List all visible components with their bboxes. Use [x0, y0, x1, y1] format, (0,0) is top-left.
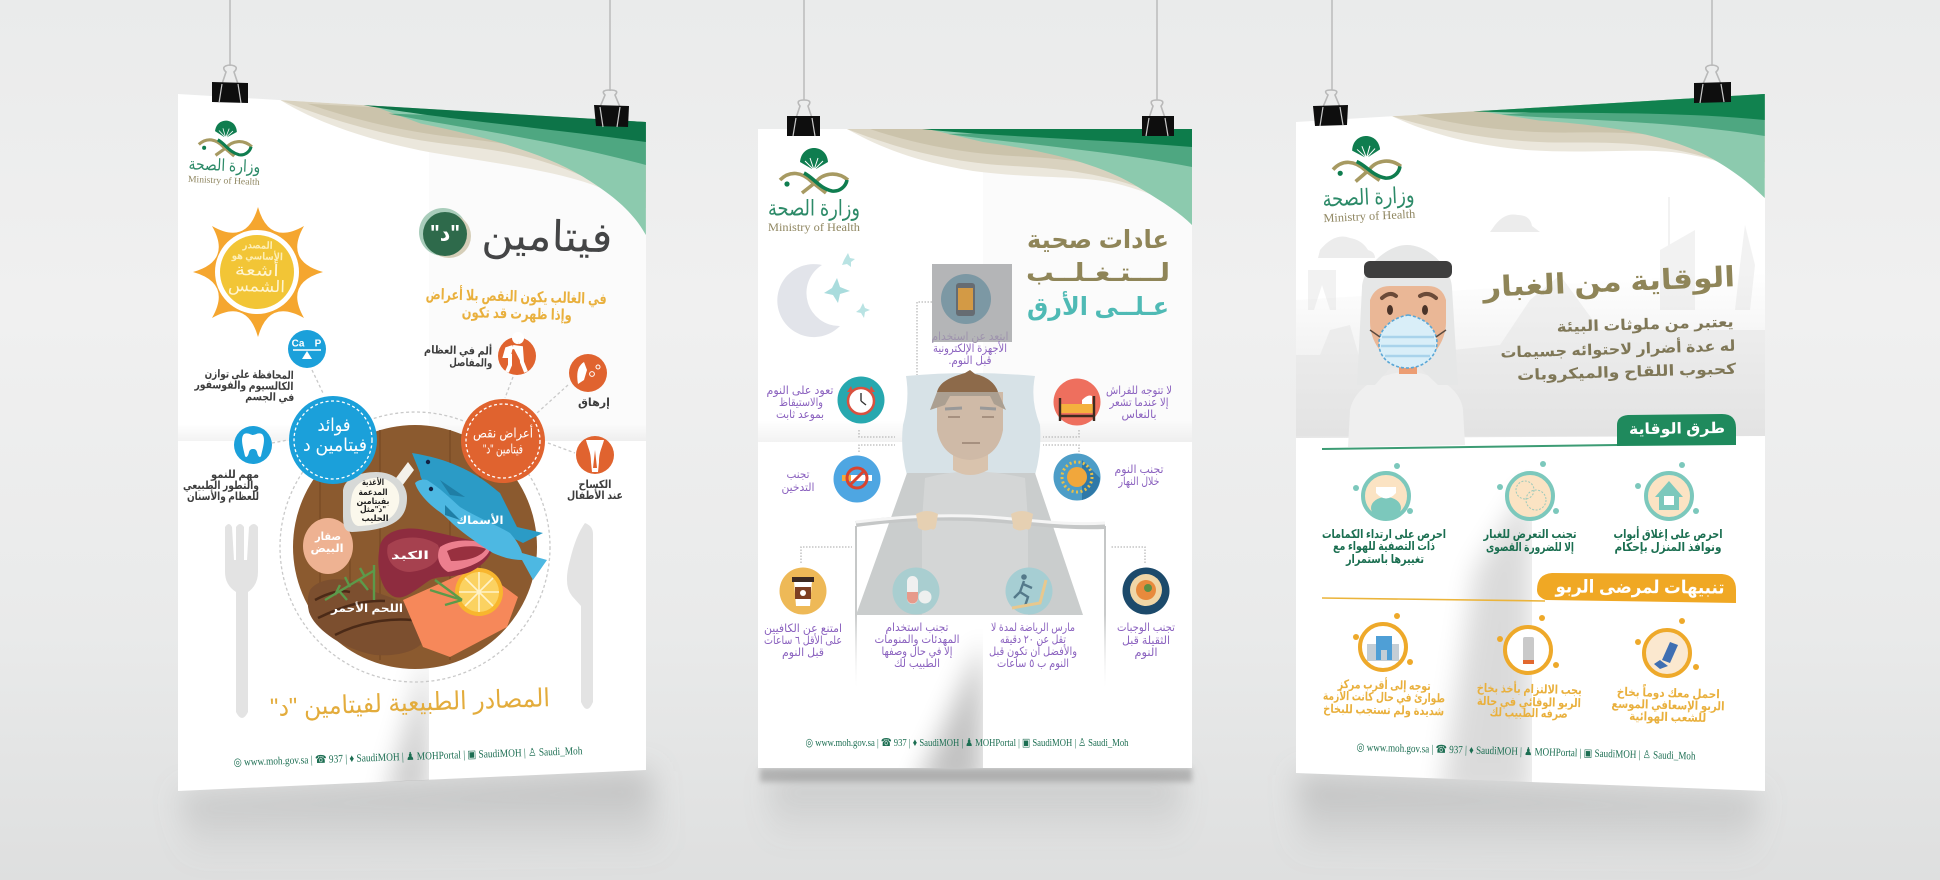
green tab: ways of protection — [1617, 414, 1736, 446]
tip: caffeine: امتنع عن الكافيين — [764, 623, 842, 636]
intro text: وإذا ظهرت قد تكون — [462, 304, 572, 324]
tip: electronic devices — [932, 331, 1008, 368]
icon: knife — [567, 523, 593, 709]
icon: bone pain — [498, 334, 536, 375]
protection text: close windows: احرص على إغلاق أبواب — [1614, 526, 1722, 542]
tip: sedatives: المهدئات والمنومات — [874, 634, 960, 647]
benefit text: calcium balance: الكالسيوم والفوسفور — [194, 379, 294, 393]
protection text: avoid dust — [1483, 527, 1576, 555]
tip: no smoking: التدخين — [782, 482, 814, 495]
protection icon: dust cloud — [1497, 461, 1559, 519]
tip: exercise: والأفضل أن تكون قبل — [989, 643, 1077, 659]
poster 2 title — [1026, 226, 1170, 321]
tip: heavy meals: تجنب الوجبات — [1117, 622, 1175, 635]
tip: fixed schedule: تعود على النوم — [766, 385, 834, 398]
icon: fork — [225, 524, 258, 718]
poster 2 logo: Ministry of Health — [768, 220, 860, 234]
poster 3 header swoosh — [1392, 94, 1765, 220]
protection text: wear masks: تغييرها باستمرار — [1345, 552, 1424, 566]
neck — [953, 445, 988, 475]
protection text: avoid dust: تجنب التعرض للغبار — [1483, 527, 1576, 541]
protection text: close windows: ونوافذ المنزل بإحكام — [1614, 540, 1722, 555]
icon: bed — [1054, 378, 1100, 426]
tip: bed: لا تتوجه للفراش — [1106, 385, 1172, 398]
thobe — [1348, 372, 1465, 447]
orange tab: asthma warnings: تنبيهات لمرضى الربو — [1555, 576, 1725, 599]
hair — [937, 370, 998, 392]
asthma text: go to emergency: طوارئ في حال كانت الأزمة — [1323, 688, 1445, 706]
asthma text: go to emergency: شديدة ولم تستجب للبخاخ — [1323, 702, 1444, 719]
fish — [412, 453, 547, 580]
poster 3 logo — [1319, 134, 1416, 225]
lemon — [455, 568, 503, 616]
poster 1 footer contacts: ◎ www.moh.gov.sa | ☎ 937 | ♦ SaudiMOH | ♟ MOHPortal | ▣ SaudiMOH | ♙ Saudi_Moh — [233, 745, 583, 769]
symptom text: fatigue: إرهاق — [578, 397, 610, 409]
tip: exercise — [989, 622, 1077, 671]
tip: exercise: النوم ب ٥ ساعات — [997, 658, 1069, 671]
protection icon: person with mask — [1353, 463, 1413, 519]
poster 3 fold shading — [1440, 480, 1532, 800]
neck — [1399, 366, 1417, 374]
tip: bed: إلا عندما تشعر — [1109, 397, 1168, 410]
poster 3 intro text: كحبوب اللقاح والميكروبات — [1517, 361, 1737, 384]
wooden plate — [293, 425, 537, 669]
milk jug: بفيتامين — [356, 496, 390, 507]
heading: natural sources: المصادر الطبيعية لفيتامين "د" — [270, 684, 550, 722]
intro text — [425, 284, 607, 325]
benefit text: growth: للعظام والأسنان — [187, 489, 259, 503]
tip: heavy meals — [1117, 622, 1175, 660]
poster 2 logo — [768, 148, 860, 234]
poster 2 sheet — [758, 129, 1192, 768]
poster shadows on the wall — [180, 768, 1760, 860]
icon: sun with text: الأساسي هو — [231, 249, 283, 263]
tip: electronic devices: قبل النوم. — [948, 355, 992, 368]
man wearing a mask — [1348, 245, 1465, 447]
tip: heavy meals: الثقيلة قبل — [1122, 635, 1170, 647]
icon: calcium phosphorus balance: P — [315, 338, 322, 350]
egg label — [310, 531, 344, 555]
icon: alarm clock — [838, 376, 884, 424]
poster 1 sheet — [178, 94, 646, 791]
poster 1 logo: Ministry of Health — [188, 174, 260, 188]
circle: vitamin D deficiency symptoms — [461, 399, 545, 483]
protection text: wear masks: احرص على ارتداء الكمامات — [1322, 527, 1446, 541]
mask — [1370, 315, 1446, 368]
circle: vitamin D benefits: فوائد — [318, 415, 350, 436]
icon: treadmill — [1006, 568, 1052, 614]
binder clips — [212, 65, 1731, 136]
icon: rickets — [576, 436, 614, 474]
hands — [916, 511, 1033, 530]
tip: daytime naps: تجنب النوم — [1114, 464, 1164, 477]
tip: sedatives: الطبيب لك — [894, 658, 940, 670]
circle: vitamin D benefits — [289, 396, 377, 484]
tip: sedatives: تجنب استخدام — [886, 622, 948, 634]
poster 1 logo — [188, 119, 263, 188]
tip: fixed schedule: بموعد ثابت — [776, 409, 824, 422]
tip: caffeine: قبل النوم — [782, 647, 824, 660]
tip: electronic devices: ابتعد عن استخدام — [932, 331, 1008, 344]
symptom text: rickets: الكساح — [578, 479, 612, 491]
icon: no smoking — [834, 456, 880, 502]
brows and eyes — [1382, 294, 1436, 298]
symptom text: pain — [424, 342, 493, 370]
poster 2 title: عـلــى الأرق — [1027, 291, 1169, 321]
icon: heavy meal — [1122, 568, 1170, 614]
liver — [378, 529, 492, 598]
plate with foods — [293, 425, 547, 669]
egg label: صفار — [314, 531, 341, 543]
asthma text: preventive inhaler: صرفه الطبيب لك — [1490, 705, 1568, 721]
plate labels: الكبد — [391, 550, 429, 562]
asthma icon: inhaler in hand — [1635, 618, 1699, 676]
symptom text: rickets — [567, 479, 623, 502]
asthma text: carry inhaler: احمل معك دوماً بخاخ — [1617, 683, 1720, 702]
dashed connectors — [272, 370, 575, 453]
tip: sedatives: إلا في حال وصفها — [882, 646, 952, 659]
orange tab: asthma warnings — [1537, 573, 1736, 603]
symptom text: pain: ألم في العظام — [424, 342, 492, 358]
milk jug — [343, 462, 414, 532]
tip: electronic devices: الأجهزة الإلكترونية — [933, 341, 1007, 356]
tip: fixed schedule: والاستيقاظ — [779, 397, 823, 410]
poster 2 fold shading — [758, 150, 1192, 790]
circle: vitamin D deficiency symptoms: فيتامين "د" — [483, 442, 523, 458]
eyes and brows — [945, 408, 996, 409]
badge: letter D — [419, 208, 471, 258]
steak — [308, 579, 428, 655]
plate dashed ring — [280, 412, 550, 682]
salmon — [403, 567, 518, 657]
protection text: avoid dust: إلا للضرورة القصوى — [1486, 540, 1574, 555]
face — [937, 392, 1003, 460]
tip: sedatives — [874, 622, 960, 670]
body — [922, 472, 1028, 615]
icon: sun with text: الشمس — [228, 278, 285, 297]
ghutra — [1357, 245, 1458, 385]
asthma icon: preventive inhaler — [1497, 615, 1559, 673]
egg — [303, 518, 353, 574]
poster 3 intro text — [1499, 314, 1737, 385]
poster 2 header swoosh — [847, 129, 1192, 225]
herbs — [325, 565, 462, 605]
poster 2: sleep habits — [758, 129, 1192, 790]
circle: vitamin D benefits: فيتامين د — [303, 435, 367, 456]
plate labels: الأسماك — [456, 513, 504, 527]
poster 2 title: عادات صحية — [1027, 226, 1169, 254]
protection text: wear masks: ذات التصفية للهواء مع — [1333, 539, 1435, 554]
plate labels — [330, 513, 504, 615]
icon: crescent moon and stars — [777, 253, 870, 337]
milk jug: الأغذية — [362, 477, 384, 487]
poster 3 logo: وزارة الصحة — [1322, 182, 1415, 212]
milk jug: الحليب — [362, 513, 389, 523]
poster 1: vitamin D — [178, 94, 646, 800]
asthma text: carry inhaler: للشعب الهوائية — [1629, 709, 1706, 726]
icon: fatigue — [569, 354, 607, 392]
sleeping man illustration — [855, 370, 1106, 687]
asthma text: preventive inhaler — [1476, 680, 1582, 721]
milk jug: "د"مثل — [360, 504, 386, 514]
milk jug: المدعمة — [358, 487, 388, 497]
tip: caffeine: على الأقل ٦ ساعات — [764, 633, 842, 647]
agal band — [1364, 261, 1452, 278]
dotted connectors — [801, 302, 1145, 563]
asthma text: go to emergency: توجه إلى أقرب مركز — [1337, 676, 1431, 694]
tip: exercise: تقل عن ٢٠ دقيقه — [1000, 634, 1066, 647]
protection text: close windows — [1614, 526, 1722, 555]
benefit text: calcium balance: في الجسم — [245, 391, 294, 404]
asthma text: preventive inhaler: يجب الالتزام بأخذ بخاخ — [1477, 680, 1582, 698]
plate labels: اللحم الأحمر — [330, 601, 403, 615]
intro text: في الغالب يكون النقص بلا أعراض — [426, 284, 607, 308]
icon: sun — [1054, 454, 1100, 500]
poster 3 logo: Ministry of Health — [1323, 207, 1416, 225]
poster 3 title: الوقاية من الغبار — [1480, 261, 1736, 304]
poster 3 intro text: له عدة أضرار لاحتوائه جسيمات — [1500, 336, 1736, 362]
circle: vitamin D deficiency symptoms: أعراض نقص — [473, 424, 533, 442]
benefit text: growth: والتطور الطبيعي — [183, 480, 259, 492]
green tab: ways of protection: طرق الوقاية — [1629, 420, 1725, 438]
tip: no smoking — [782, 469, 814, 495]
poster 1 header swoosh — [280, 100, 646, 235]
face — [1370, 286, 1446, 365]
pillow — [902, 373, 1040, 475]
poster 2 logo: وزارة الصحة — [768, 196, 860, 220]
blanket — [856, 473, 1083, 615]
icon: sun with text: أشعة — [235, 259, 279, 280]
tip: heavy meals: النوم — [1134, 647, 1158, 660]
tip: daytime naps: خلال النهار — [1118, 476, 1160, 489]
grey square behind phone icon — [932, 264, 1012, 342]
poster 2 footer contacts: ◎ www.moh.gov.sa | ☎ 937 | ♦ SaudiMOH | ♟ MOHPortal | ▣ SaudiMOH | ♙ Saudi_Moh — [806, 737, 1129, 749]
icon: pills — [892, 568, 940, 614]
icon: sun with text: المصدر — [242, 240, 273, 252]
poster 1 logo: وزارة الصحة — [188, 155, 261, 177]
icon: calcium phosphorus balance — [288, 330, 326, 368]
benefit text: calcium balance — [193, 368, 295, 404]
asthma text: carry inhaler: الربو الإسعافي الموسع — [1611, 697, 1725, 714]
tip: daytime naps — [1114, 464, 1164, 489]
asthma text: carry inhaler — [1611, 683, 1725, 726]
symptom text: rickets: عند الأطفال — [567, 488, 623, 502]
poster 1 fold shading — [178, 109, 646, 800]
protection text: wear masks — [1322, 527, 1446, 566]
benefit text: growth: مهم للنمو — [210, 469, 259, 481]
cover edge — [856, 518, 1105, 526]
sheet side lines — [855, 526, 1106, 687]
benefit text: growth — [183, 469, 259, 503]
tip: fixed schedule — [766, 385, 834, 422]
poster 2 title: لـــتـغـلــب — [1026, 259, 1170, 287]
poster 3 footer contacts: ◎ www.moh.gov.sa | ☎ 937 | ♦ SaudiMOH | ♟ MOHPortal | ▣ SaudiMOH | ♙ Saudi_Moh — [1356, 742, 1696, 762]
asthma icon: hospital — [1353, 613, 1413, 670]
tip: no smoking: تجنب — [786, 469, 810, 481]
grey hair sides — [930, 392, 1006, 410]
poster 3 sheet — [1296, 94, 1765, 791]
icon: sun with text — [193, 207, 323, 337]
protection icon: lock house — [1635, 462, 1699, 519]
poster 1 title: vitamin: فيتامين — [481, 211, 613, 262]
benefit text: calcium balance: المحافظة على توازن — [205, 368, 294, 382]
symptom text: pain: والمفاصل — [449, 357, 493, 370]
poster 3 intro text: يعتبر من ملوثات البيئة — [1556, 314, 1734, 336]
egg label: البيض — [310, 543, 344, 555]
asthma text: go to emergency — [1323, 676, 1445, 719]
icon: calcium phosphorus balance: Ca — [292, 338, 305, 350]
icon: tooth — [234, 426, 272, 464]
tip: caffeine — [764, 623, 842, 660]
dusty city skyline — [1296, 197, 1765, 438]
icon: coffee cup — [780, 568, 826, 614]
hanging strings — [230, 0, 1712, 100]
tip: bed — [1106, 385, 1172, 422]
badge: letter D: "د" — [430, 220, 460, 246]
asthma text: preventive inhaler: الربو الوقائي في حالة — [1477, 694, 1581, 711]
tip: exercise: مارس الرياضة لمدة لا — [991, 622, 1075, 635]
tip: bed: بالنعاس — [1122, 409, 1156, 422]
poster 3: dust protection — [1296, 94, 1765, 800]
icon: phone — [941, 274, 991, 324]
